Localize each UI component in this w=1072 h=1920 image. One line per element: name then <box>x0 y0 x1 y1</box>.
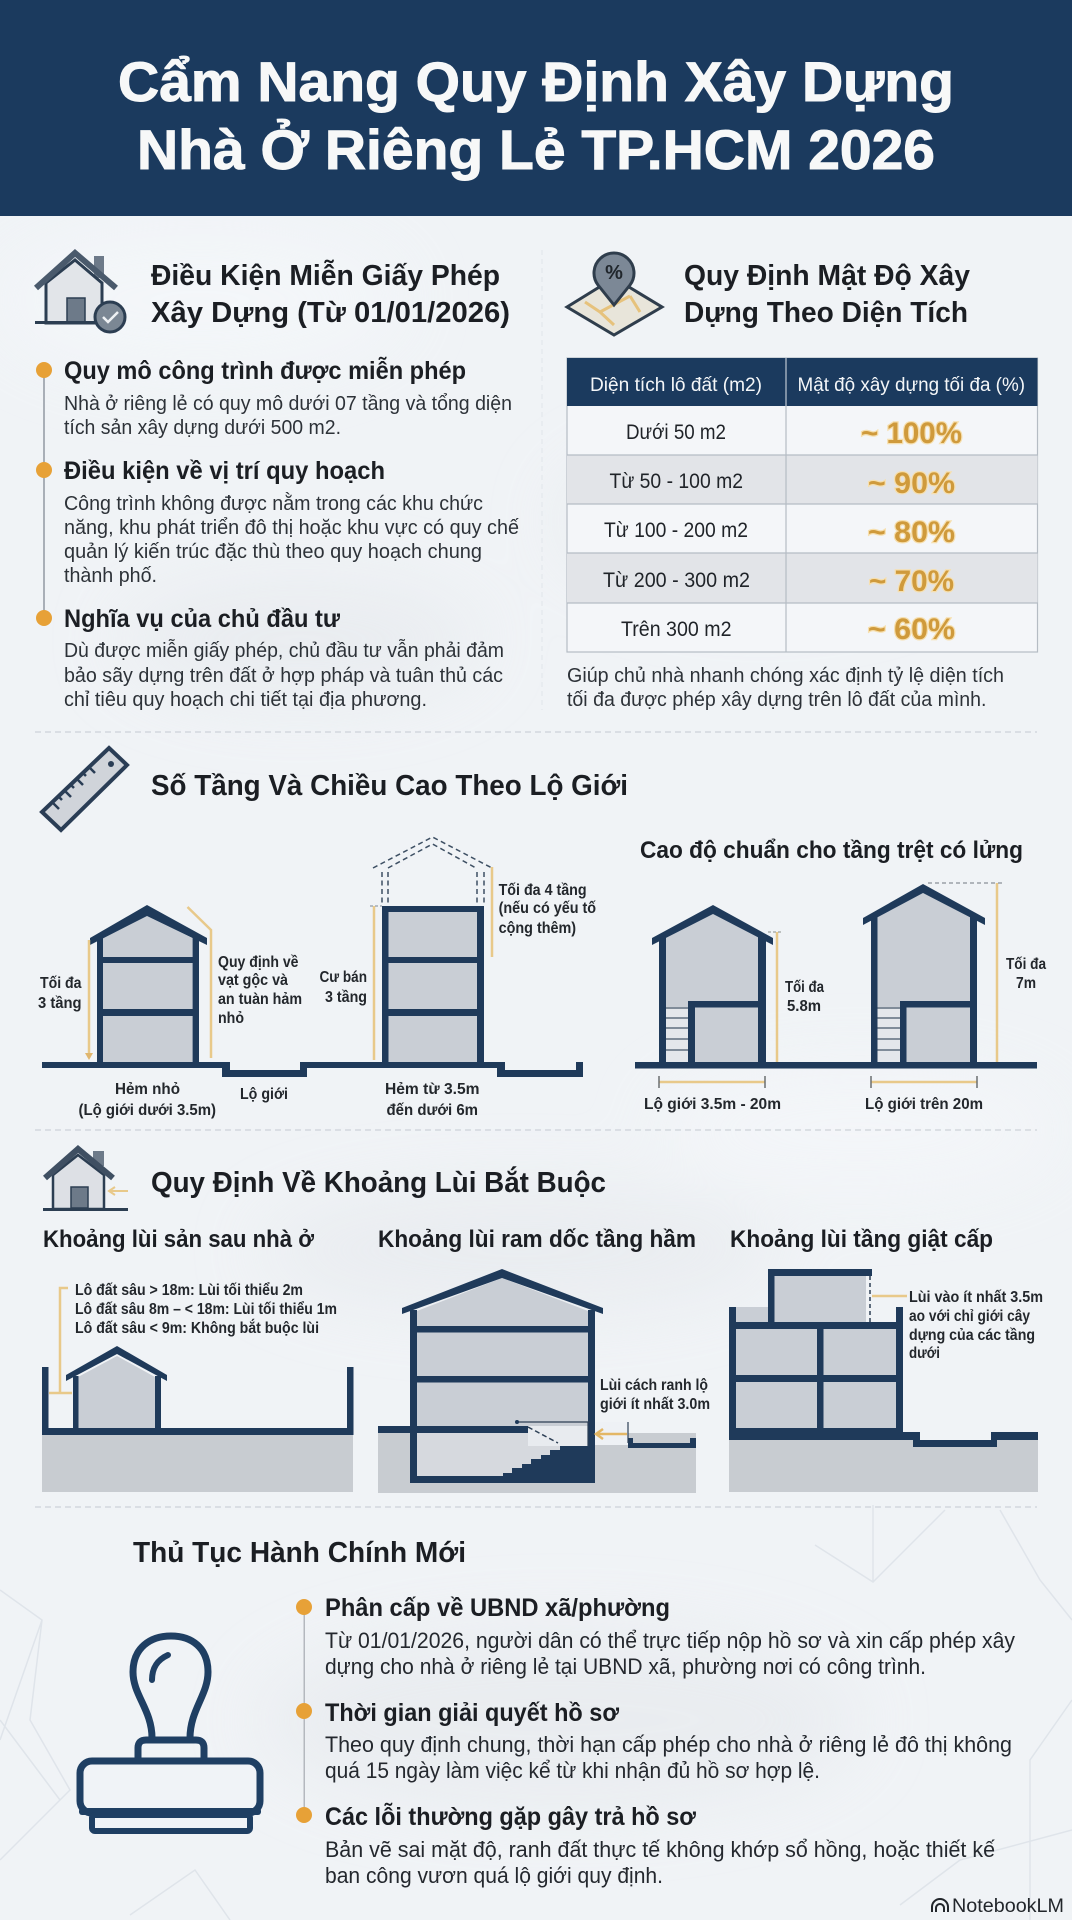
caption <box>567 665 1004 711</box>
setback note: dựng của các tầng <box>909 1327 1035 1344</box>
table header: Diện tích lô đất (m2) <box>590 375 762 396</box>
item: processing time: Theo quy định chung, thời hạn cấp phép cho nhà ở riêng lẻ đô thị không <box>325 1732 1012 1757</box>
diagram: house on 3.5m to 6m alley <box>320 837 596 1119</box>
note: chamfered corner rule <box>188 907 302 1058</box>
item: planning location: Điều kiện về vị trí quy hoạch <box>64 457 385 485</box>
item: investor obligations: bảo sãy dựng trên đất ở hợp pháp và tuân thủ các <box>64 665 503 687</box>
item: project scale: Quy mô công trình được miễn phép <box>64 355 466 385</box>
item: common errors: ban công vươn quá lộ giới quy định. <box>325 1863 663 1888</box>
row: Từ 50 - 100 m2 <box>610 470 743 493</box>
heading: Quy Định Về Khoảng Lùi Bắt Buộc <box>151 1165 606 1199</box>
timeline bullets <box>296 1599 312 1823</box>
sub-panel: basement ramp setback <box>378 1226 710 1493</box>
ground line <box>635 1062 1037 1068</box>
ramp <box>503 1446 595 1478</box>
title: Nhà Ở Riêng Lẻ TP.HCM 2026 <box>137 118 935 181</box>
dashed extra floor <box>373 837 492 905</box>
dimension: max 7m: Tối đa <box>1006 956 1046 973</box>
heading: Xây Dựng (Từ 01/01/2026) <box>151 297 510 329</box>
dimension: max 3 floors <box>38 940 93 1060</box>
density table <box>567 358 1038 652</box>
row: ~ 70% <box>869 565 954 598</box>
setback note: giới ít nhất 3.0m <box>600 1396 710 1413</box>
dimension: 4 floors note: (nếu có yếu tố <box>499 900 596 917</box>
label: alley width <box>385 1081 480 1119</box>
caption: Giúp chủ nhà nhanh chóng xác định tỷ lệ diện tích <box>567 665 1004 687</box>
item: planning location: Công trình không được nằm trong các khu chức <box>64 492 483 515</box>
icon: house with setback arrow <box>43 1149 128 1211</box>
diagram: house with 5.8m limit <box>644 905 824 1113</box>
item: processing time: quá 15 ngày làm việc kể từ khi nhận đủ hồ sơ hợp lệ. <box>325 1758 820 1783</box>
item: planning location: năng, khu phát triển đô thị hoặc khu vực có quy chế <box>64 517 519 539</box>
setback note <box>909 1289 1043 1362</box>
diagram: house in small alley <box>38 905 302 1119</box>
timeline bullets <box>36 362 52 626</box>
dimension: max 5.8m: 5.8m <box>787 998 821 1015</box>
item: ward level <box>325 1594 1015 1679</box>
setback arrow <box>596 1429 627 1439</box>
sub-panel: basement ramp setback: Khoảng lùi ram dốc tầng hầm <box>378 1226 696 1253</box>
row: Trên 300 m2 <box>621 618 732 641</box>
caption: tối đa được phép xây dựng trên lô đất của mình. <box>567 689 986 711</box>
item: project scale: tích sản xây dựng dưới 500 m2. <box>64 417 341 439</box>
dimension: base 3 floors <box>320 906 382 1060</box>
dimension: base 3 floors: 3 tầng <box>325 989 367 1006</box>
item: common errors: Các lỗi thường gặp gây trả hồ sơ <box>325 1801 696 1831</box>
dimension: max 3 floors: Tối đa <box>40 975 82 992</box>
title: Cẩm Nang Quy Định Xây Dựng <box>118 50 954 113</box>
note: chamfered corner rule: vạt gộc và <box>218 972 288 989</box>
dimension: base 3 floors: Cư bán <box>320 969 367 986</box>
road <box>628 1438 696 1448</box>
row <box>603 565 954 598</box>
heading: Thủ Tục Hành Chính Mới <box>133 1537 466 1569</box>
dimension: 4 floors note: Tối đa 4 tầng <box>499 882 587 899</box>
label: small alley: (Lộ giới dưới 3.5m) <box>78 1102 216 1119</box>
row: Từ 100 - 200 m2 <box>604 519 748 542</box>
dimension: 4 floors note <box>492 867 596 957</box>
row: ~ 100% <box>861 417 962 450</box>
heading: mezzanine height: Cao độ chuẩn cho tầng trệt có lửng <box>640 837 1023 864</box>
sub-panel: stepped floor setback: Khoảng lùi tầng giật cấp <box>730 1226 993 1253</box>
item: ward level: Phân cấp về UBND xã/phường <box>325 1594 670 1622</box>
dimension: road over 20m <box>865 1076 983 1113</box>
NotebookLM logo: NotebookLM <box>952 1896 1064 1917</box>
item: planning location: quản lý kiến trúc đặc thù theo quy hoạch chung <box>64 541 482 563</box>
setback rules: Lô đất sâu < 9m: Không bắt buộc lùi <box>75 1318 319 1337</box>
row <box>610 467 955 500</box>
row: Dưới 50 m2 <box>626 421 726 444</box>
item: project scale: Nhà ở riêng lẻ có quy mô dưới 07 tầng và tổng diện <box>64 393 512 415</box>
panel: floors and height by road boundary <box>38 748 1046 1119</box>
dimension: road over 20m: Lộ giới trên 20m <box>865 1096 983 1113</box>
heading: Dựng Theo Diện Tích <box>684 297 968 329</box>
setback rules: Lô đất sâu > 18m: Lùi tối thiểu 2m <box>75 1281 303 1299</box>
row <box>621 613 955 646</box>
section diagram <box>42 1288 354 1492</box>
setback rules <box>75 1281 337 1337</box>
icon: map pin: % <box>605 262 623 284</box>
dimension: road 3.5m to 20m: Lộ giới 3.5m - 20m <box>644 1096 781 1113</box>
setback note <box>600 1377 710 1413</box>
panel: permit exemption conditions <box>35 253 519 711</box>
dimension: road 3.5m to 20m <box>644 1076 781 1113</box>
label: road boundary: Lộ giới <box>240 1086 288 1103</box>
icon: ruler <box>42 748 127 830</box>
dimension: max 3 floors: 3 tầng <box>38 995 82 1012</box>
dimension: max 7m: 7m <box>1016 975 1036 992</box>
table header <box>590 375 1025 396</box>
item: investor obligations: Nghĩa vụ của chủ đầu tư <box>64 605 341 633</box>
item: investor obligations: chỉ tiêu quy hoạch chi tiết tại địa phương. <box>64 689 427 711</box>
row: ~ 90% <box>868 467 955 500</box>
item: planning location: thành phố. <box>64 565 157 587</box>
sub-panel: rear yard setback: Khoảng lùi sản sau nhà ở <box>43 1226 315 1253</box>
ground and road profile <box>42 1062 583 1077</box>
note: chamfered corner rule: nhỏ <box>218 1010 244 1027</box>
dimension: max 7m <box>928 883 1046 1062</box>
note: chamfered corner rule: Quy định về <box>218 954 299 971</box>
panel: building density <box>567 253 1038 711</box>
heading: Quy Định Mật Độ Xây <box>684 260 970 292</box>
icon: house with check <box>35 253 125 332</box>
dimension: max 5.8m: Tối đa <box>785 979 824 996</box>
diagram: house with 7m limit <box>863 883 1046 1113</box>
label: alley width: đến dưới 6m <box>386 1102 478 1119</box>
icon: map pin <box>567 253 662 335</box>
heading: Số Tầng Và Chiều Cao Theo Lộ Giới <box>151 770 628 802</box>
row <box>626 417 962 450</box>
label: small alley: Hẻm nhỏ <box>115 1081 180 1098</box>
sub-panel: rear yard setback <box>42 1226 354 1492</box>
header banner <box>0 0 1072 216</box>
setback note: Lùi cách ranh lộ <box>600 1377 708 1394</box>
label: alley width: Hẻm từ 3.5m <box>385 1081 480 1098</box>
item: processing time <box>325 1699 1012 1783</box>
item: common errors: Bản vẽ sai mặt độ, ranh đất thực tế không khớp sổ hồng, hoặc thiết kế <box>325 1837 995 1862</box>
item: project scale <box>64 355 512 439</box>
dimension: 4 floors note: cộng thêm) <box>499 920 576 937</box>
item: processing time: Thời gian giải quyết hồ sơ <box>325 1699 619 1727</box>
item: investor obligations <box>64 605 504 711</box>
item: common errors <box>325 1801 995 1888</box>
row: Từ 200 - 300 m2 <box>603 569 750 592</box>
icon: stamp <box>79 1636 261 1831</box>
setback rules: Lô đất sâu 8m – < 18m: Lùi tối thiểu 1m <box>75 1300 337 1318</box>
heading <box>151 258 510 329</box>
section diagram <box>729 1269 1043 1492</box>
item: investor obligations: Dù được miễn giấy phép, chủ đầu tư vẫn phải đảm <box>64 639 504 662</box>
item: planning location <box>64 457 519 587</box>
note: chamfered corner rule: an tuàn hảm <box>218 991 302 1008</box>
panel: administrative procedures <box>79 1537 1015 1888</box>
item: ward level: dựng cho nhà ở riêng lẻ tại UBND xã, phường nơi có công trình. <box>325 1654 926 1679</box>
table header: Mật độ xây dựng tối đa (%) <box>798 375 1025 396</box>
label: small alley <box>78 1081 216 1119</box>
section diagram <box>378 1269 710 1493</box>
setback note: ao với chỉ giới cây <box>909 1308 1030 1325</box>
panel: mandatory setbacks <box>42 1149 1043 1493</box>
item: ward level: Từ 01/01/2026, người dân có thể trực tiếp nộp hồ sơ và xin cấp phép xây <box>325 1628 1015 1653</box>
road <box>903 1432 1038 1447</box>
row: ~ 60% <box>868 613 955 646</box>
setback note: dưới <box>909 1345 940 1362</box>
dimension: max 5.8m <box>768 932 824 1062</box>
sub-panel: stepped floor setback <box>729 1226 1043 1492</box>
setback note: Lùi vào ít nhất 3.5m <box>909 1289 1043 1306</box>
row <box>604 516 955 549</box>
heading: Điều Kiện Miễn Giấy Phép <box>151 258 500 292</box>
title <box>118 50 954 181</box>
row: ~ 80% <box>868 516 955 549</box>
heading <box>684 260 970 329</box>
